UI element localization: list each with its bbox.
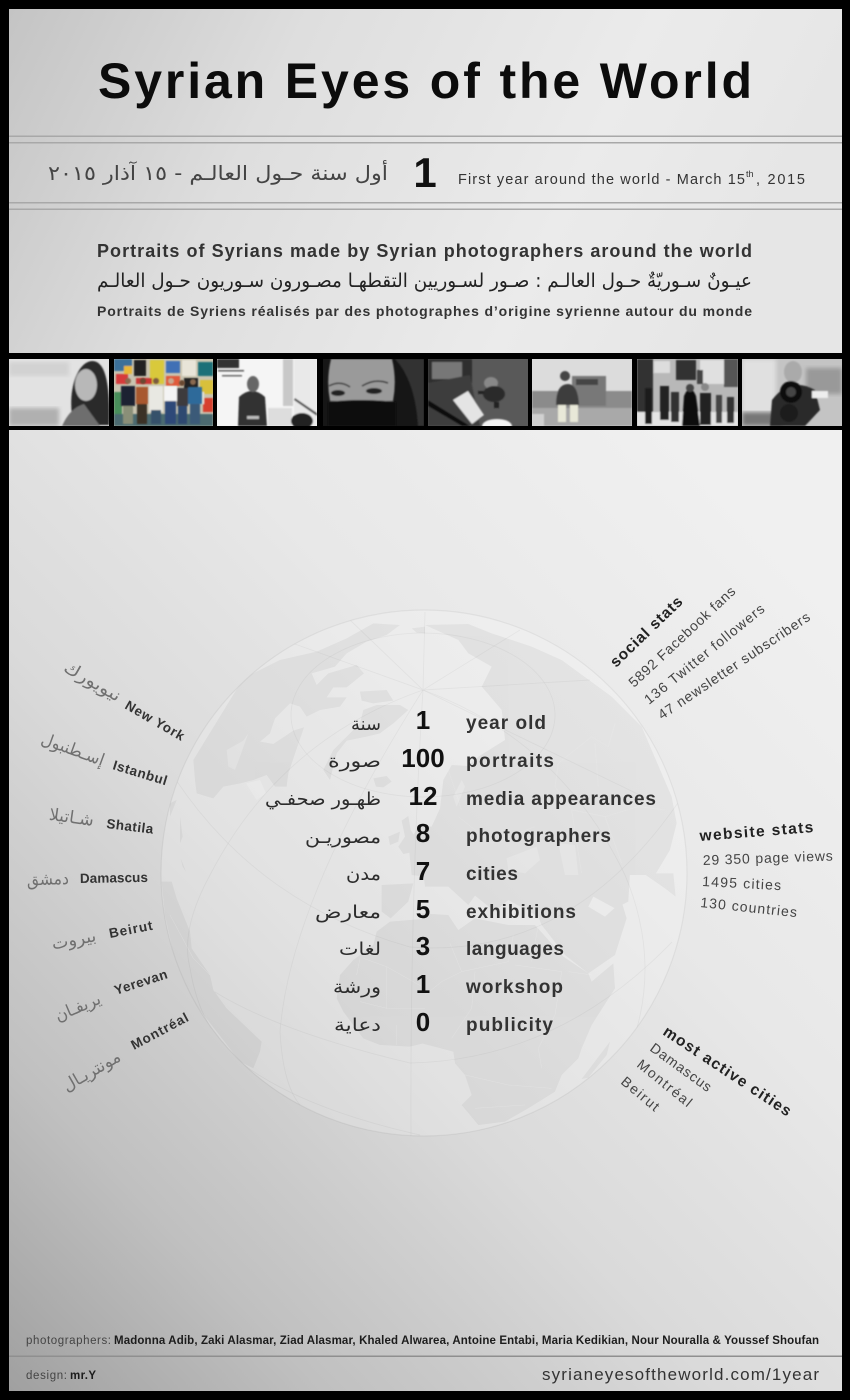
social stats [607,583,813,722]
photo: group at mosaic wall [114,359,213,426]
city: Montréal [59,1010,191,1096]
arabic description: عيـونٌ سـوريّةٌ حـول العالـم : صـور لسـوريين التقطهـا مصـورون سـوريون حـول العالـم [97,270,752,292]
english subtitle: , 2015 [756,172,805,188]
city: Shatila [48,805,155,837]
arabic subtitle: أول سنة حـول العالـم - ١٥ آذار ٢٠١٥ [48,160,388,185]
big number one: 1 [413,149,437,196]
photo: street crowd [637,359,738,426]
stat: media appearances: ظهـور صحفـي [265,789,381,810]
panel: header [9,9,842,353]
social stats: 136 Twitter followers [641,600,767,707]
city: Yerevan: يريفـان [52,989,104,1026]
stat: media appearances [265,781,656,811]
photo strip [9,359,842,433]
most active cities: Damascus [647,1039,715,1095]
stat: cities: 7 [416,856,430,886]
city: Shatila: شـاتيلا [48,805,95,831]
stat: photographers: مصوريـن [305,827,381,848]
city: Istanbul: Istanbul [111,758,169,788]
stat: cities [346,856,518,886]
land masses [162,623,677,1125]
social stats: social stats [607,593,686,671]
stat: workshop: ورشة [333,977,381,998]
most active cities: Beirut [618,1073,663,1114]
social stats: 47 newsletter subscribers [655,609,813,722]
stat: exhibitions: 5 [416,894,430,924]
city: Damascus [27,869,148,890]
most active cities: Montréal [634,1056,695,1110]
photo: man seated in front of building [532,359,632,426]
city: Beirut: بيروت [50,926,98,954]
city: Istanbul [38,729,169,788]
stat: portraits: portraits [466,751,554,772]
stat: languages: 3 [416,931,430,961]
english subtitle: First year around the world - March 15 [458,172,745,188]
stat: photographers: 8 [416,818,430,848]
graticule [176,612,680,1136]
photo: child in room [217,359,317,429]
design credit [26,1370,96,1382]
social stats: 5892 Facebook fans [625,583,738,690]
city: Yerevan [52,967,169,1026]
stat: portraits [328,743,554,773]
stat: workshop: 1 [416,969,430,999]
stat: year old [351,705,546,735]
city: Beirut: Beirut [108,918,154,941]
stat: year old: سنة [351,714,381,735]
stat: year old: year old [466,713,546,734]
city: New York: نيويورك [60,658,124,706]
city: Damascus: دمشق [27,869,69,890]
city: Yerevan: Yerevan [112,967,169,998]
stat: publicity: publicity [466,1015,553,1036]
website stats [698,819,833,920]
city: Shatila: Shatila [106,816,155,837]
stat: languages: languages [466,939,564,960]
city: New York [60,658,188,744]
stat: portraits: صورة [328,751,381,772]
city: Damascus: Damascus [80,870,148,886]
most active cities: most active cities [660,1023,794,1120]
city: Istanbul: إسـطنبول [38,729,107,771]
stat: languages: لغات [339,939,381,960]
stat: workshop: workshop [465,977,563,998]
english subtitle [458,169,805,188]
city: Montréal: مونتريـال [59,1047,124,1096]
stat: media appearances: 12 [409,781,437,811]
photo: woman with niqab [323,359,424,426]
panel: lower body [9,430,842,1391]
website stats: 130 countries [700,894,798,920]
stat: portraits: 100 [401,743,445,773]
english subtitle: th [746,169,754,179]
website stats: 1495 cities [702,873,782,893]
globe [161,610,687,1136]
design credit: design: [26,1370,67,1382]
stat: cities: مدن [346,864,381,885]
photographers credit: Madonna Adib, Zaki Alasmar, Ziad Alasmar, Khaled Alwarea, Antoine Entabi, Maria Kedikian, Nour Nouralla & Youssef Shoufan [114,1335,819,1347]
stat: cities: cities [466,864,518,885]
photographers credit: photographers: [26,1335,111,1347]
stat: exhibitions: معارض [315,902,381,923]
country borders [170,915,506,1108]
stat: publicity: 0 [416,1007,430,1037]
water bodies [227,733,578,875]
stat: languages [339,931,564,961]
english description: Portraits of Syrians made by Syrian photographers around the world [97,241,752,261]
title: Syrian Eyes of the World [98,53,752,109]
stat: photographers [305,818,611,848]
photo: man seen from above [428,359,528,433]
stat: photographers: photographers [466,826,611,847]
stat: year old: 1 [416,705,430,735]
stat: publicity [334,1007,553,1037]
photo: photographer with camera [742,359,842,426]
stat: workshop [333,969,563,999]
stat: exhibitions [315,894,576,924]
website stats: website stats [698,819,814,845]
city: Montréal: Montréal [128,1010,191,1053]
french description: Portraits de Syriens réalisés par des photographes d’origine syrienne autour du monde [97,303,752,319]
city list [27,658,191,1096]
city: New York: New York [122,698,188,744]
website stats: 29 350 page views [703,847,833,868]
stat: media appearances: media appearances [466,789,656,810]
stat: publicity: دعاية [334,1015,381,1036]
stats table [265,705,656,1037]
city: Beirut [50,918,154,954]
photo: woman portrait [9,359,109,426]
stat: exhibitions: exhibitions [466,902,576,923]
design credit: mr.Y [70,1370,96,1382]
website url: syrianeyesoftheworld.com/1year [542,1365,819,1384]
